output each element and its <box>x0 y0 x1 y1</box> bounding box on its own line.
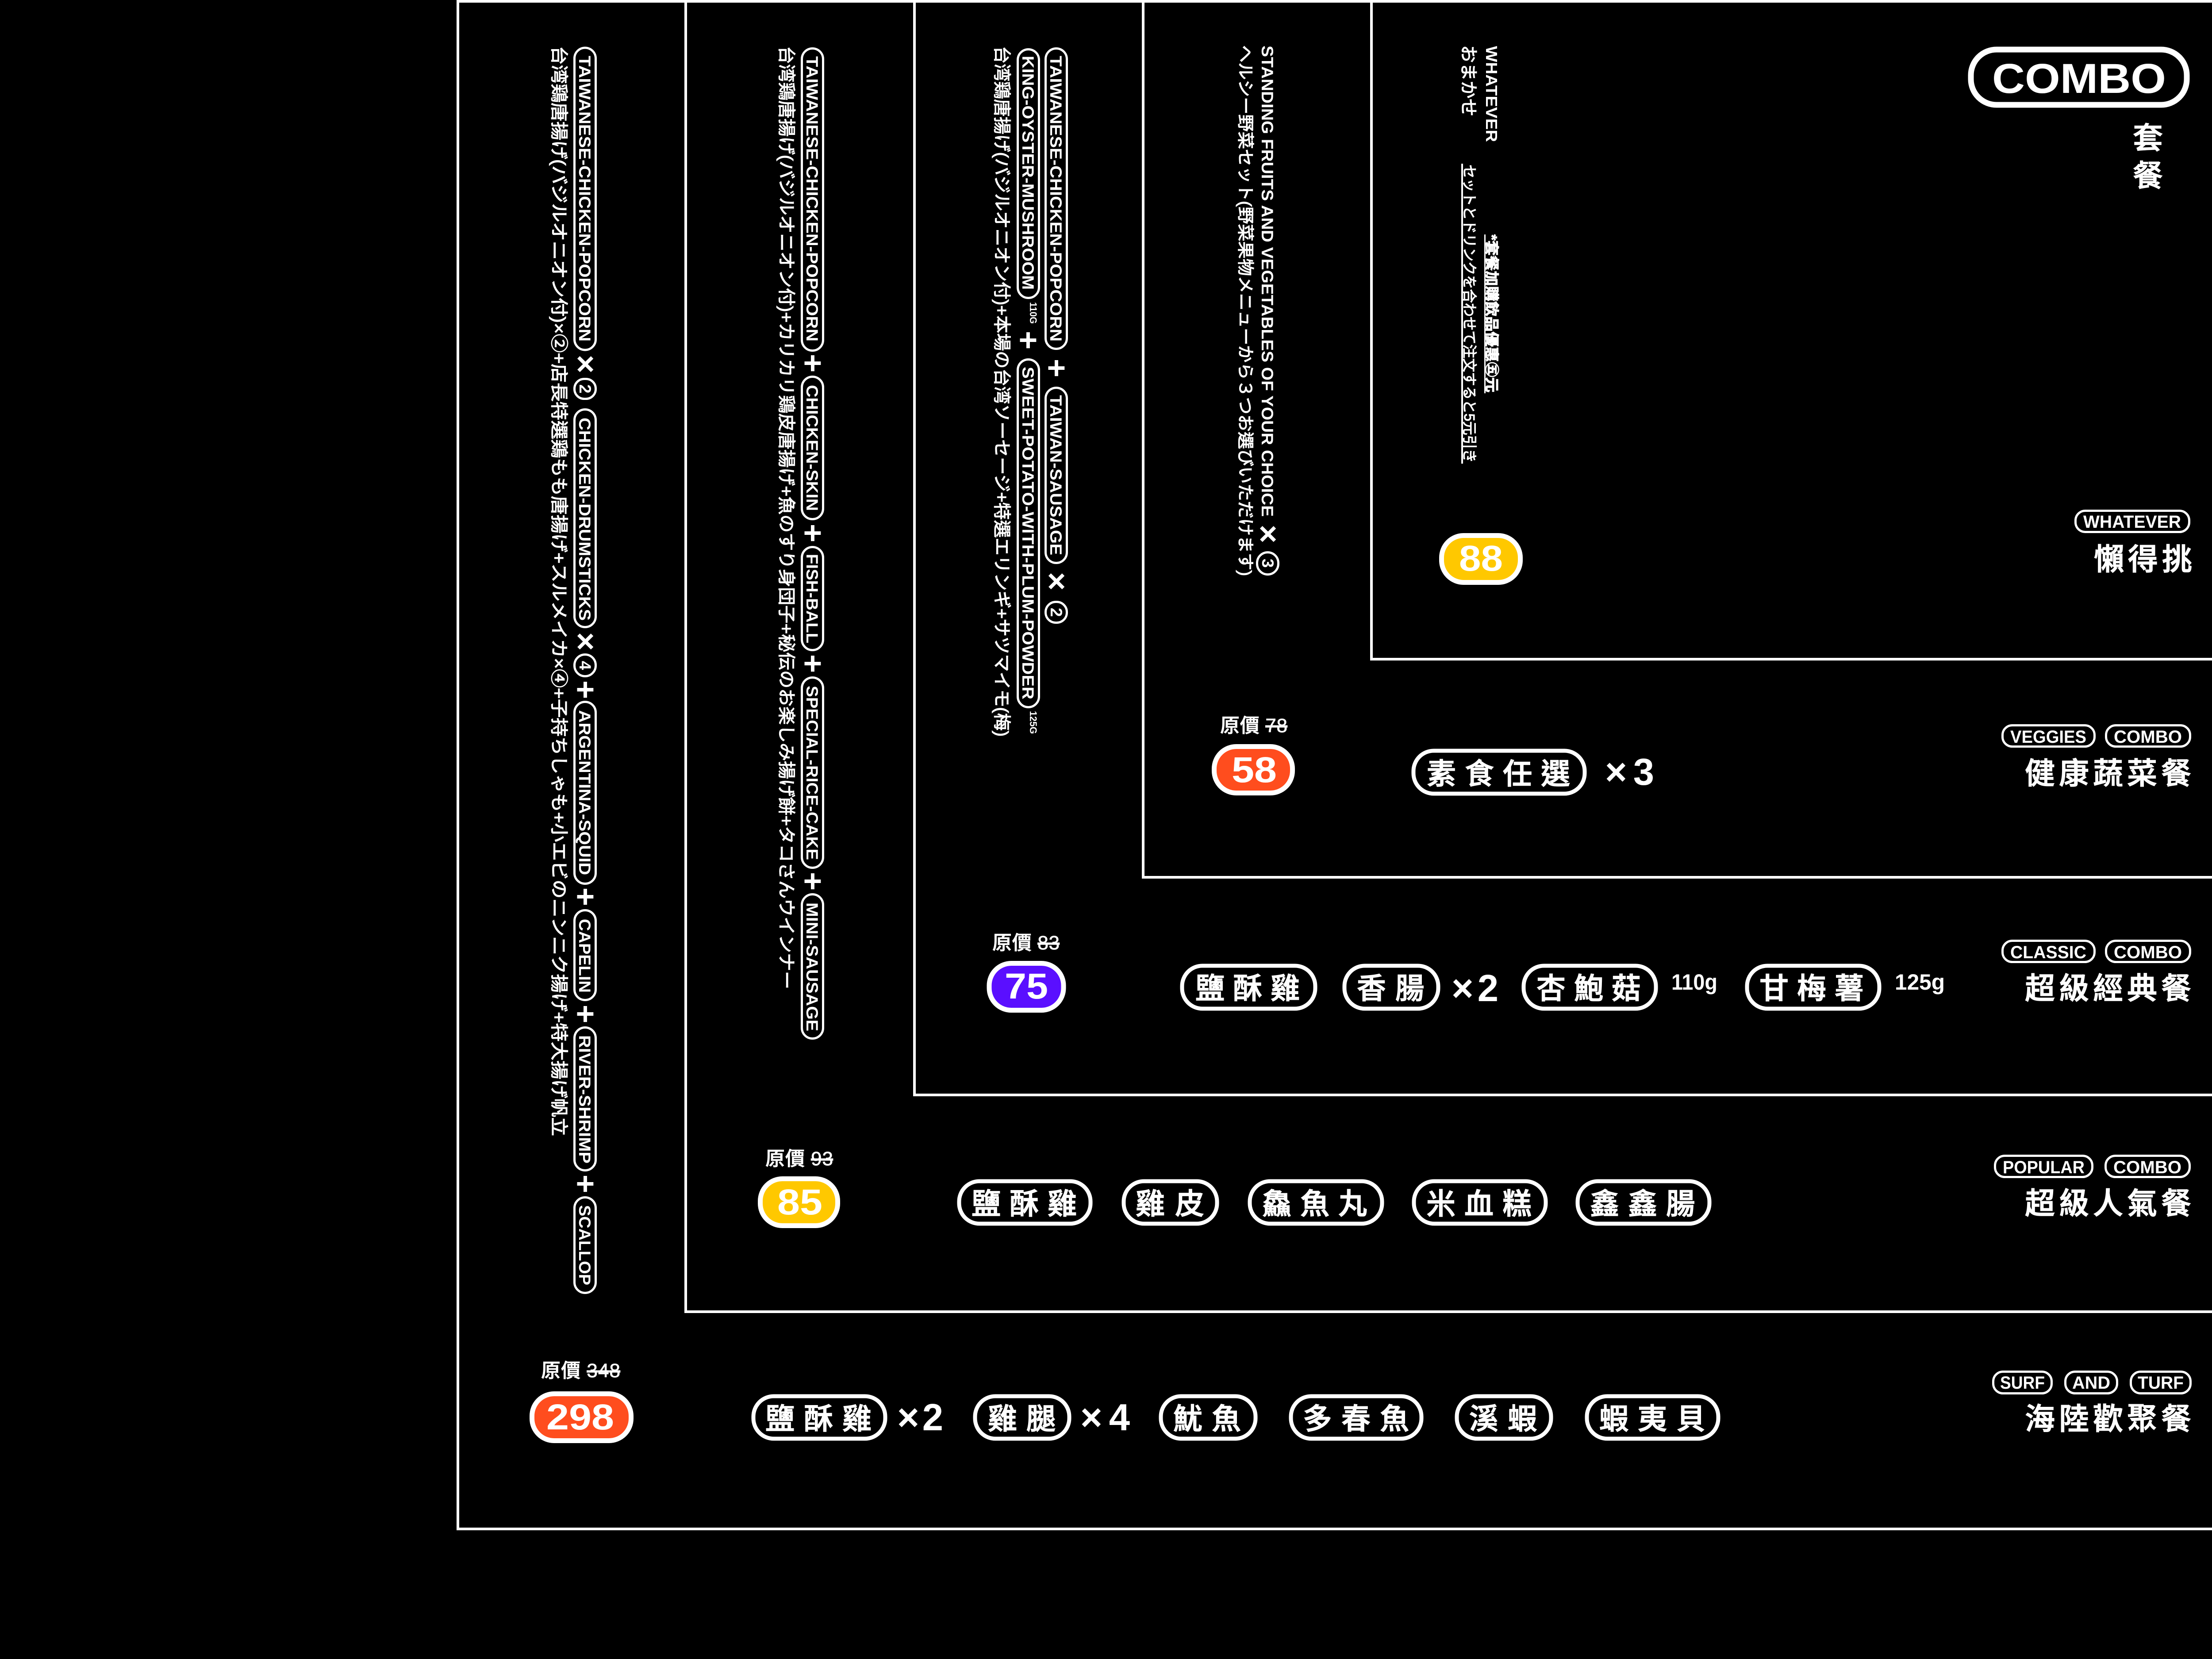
vertical operator: plus: + <box>568 680 603 699</box>
vertical pill: chicken drumsticks: CHICKEN-DRUMSTICKS <box>576 418 594 621</box>
vertical count: 2 <box>574 379 595 399</box>
pill: 多春魚 <box>1291 1396 1421 1439</box>
vertical operator: plus: + <box>795 524 830 542</box>
panel content: veggies combo <box>1214 45 2195 794</box>
price: 75 <box>989 964 1064 1010</box>
panel content: whatever <box>1441 45 2196 582</box>
vertical text: standing fruits: STANDING FRUITS AND VEGETABLES OF YOUR CHOICE <box>1258 46 1276 517</box>
vertical pill: fish ball: FISH-BALL <box>803 554 821 643</box>
vertical pill: taiwanese chicken popcorn: TAIWANESE-CHICKEN-POPCORN <box>576 56 594 342</box>
vertical count: 2: 2 <box>1047 608 1065 617</box>
pill: 雞皮 <box>1124 1181 1217 1224</box>
panel frame: popular combo <box>686 1 2212 1312</box>
price: 298: 298 <box>546 1397 614 1437</box>
vertical text: おまかせ: おまかせ <box>1459 45 1478 116</box>
pill: 香腸: 香腸 <box>1357 972 1434 1005</box>
tag: WHATEVER: WHATEVER <box>2083 512 2181 532</box>
title: 套餐: 餐 <box>2133 159 2167 193</box>
vertical pill: mini sausage: MINI-SAUSAGE <box>803 902 821 1031</box>
tag: AND: AND <box>2072 1373 2110 1393</box>
pill: 鱻魚丸 <box>1250 1181 1382 1224</box>
multiplier x3: ×3 <box>1605 751 1654 793</box>
panel frame: veggies combo <box>1143 1 2212 877</box>
vertical operator: times: × <box>568 632 603 651</box>
vertical text: Japanese description: ヘルシー野菜セット(野菜果物メニューから３つお選びいただけます) <box>1236 45 1254 576</box>
tag: COMBO: COMBO <box>2114 943 2182 962</box>
pill: 鹽酥雞: 鹽酥雞 <box>1195 972 1308 1005</box>
pill: 鑫鑫腸: 鑫鑫腸 <box>1590 1187 1704 1220</box>
pill: 鹽酥雞: 鹽酥雞 <box>765 1402 881 1435</box>
vertical weight 125G: 125G <box>1028 711 1039 734</box>
pill: 多春魚: 多春魚 <box>1303 1402 1418 1435</box>
title: 套餐: 套 <box>2133 122 2167 155</box>
tag: COMBO: COMBO <box>2114 727 2182 747</box>
vertical operator: plus: + <box>568 1005 603 1023</box>
vertical pill: river shrimp: RIVER-SHRIMP <box>576 1035 594 1164</box>
vertical pill: taiwanese chicken popcorn: TAIWANESE-CHICKEN-POPCORN <box>1047 56 1065 342</box>
pill: 鹽酥雞 <box>753 1396 885 1439</box>
heading: 健康蔬菜餐: 健康蔬菜餐 <box>2025 757 2195 791</box>
vertical operator: plus: + <box>795 872 830 891</box>
vertical pill: special rice cake: SPECIAL-RICE-CAKE <box>803 686 821 860</box>
vertical count: 3 <box>1257 552 1279 574</box>
vertical note: drink discount (Japanese): セットとドリンクを合わせて注文すると5元引き <box>1461 165 1478 463</box>
tag: TURF: TURF <box>2138 1373 2184 1393</box>
vertical operator: times: × <box>1250 525 1286 543</box>
vertical pill: scallop: SCALLOP <box>576 1205 594 1285</box>
heading: 懶得挑: 懶得挑 <box>2094 543 2196 576</box>
price: 88 <box>1441 535 1520 582</box>
original price 348: 原價 348 <box>541 1360 620 1382</box>
tag: AND <box>2065 1371 2117 1394</box>
pill: 甘梅薯 <box>1747 966 1879 1009</box>
pill: 魷魚: 魷魚 <box>1173 1402 1250 1435</box>
pill: 素食任選: 素食任選 <box>1427 757 1579 790</box>
pill: 溪蝦 <box>1457 1396 1551 1439</box>
heading: 超級人氣餐: 超級人氣餐 <box>2025 1187 2195 1221</box>
pill: 鱻魚丸: 鱻魚丸 <box>1262 1187 1376 1220</box>
price: 58: 58 <box>1232 750 1277 790</box>
vertical operator: times: × <box>1039 572 1074 591</box>
price: 85: 85 <box>777 1182 822 1222</box>
pill: 鹽酥雞 <box>959 1181 1091 1224</box>
price: 298 <box>532 1394 631 1440</box>
vertical operator: plus: + <box>795 654 830 673</box>
vertical count: 3: 3 <box>1259 559 1277 568</box>
original price 93: 原價 93 <box>765 1148 833 1170</box>
original price 83: 原價 83 <box>992 932 1060 954</box>
pill: 鑫鑫腸 <box>1578 1181 1709 1224</box>
vertical count: 2: 2 <box>576 384 594 393</box>
pill: 雞皮: 雞皮 <box>1136 1187 1214 1220</box>
pill: 香腸 <box>1344 966 1438 1009</box>
vertical weight 110G: 110G <box>1028 302 1039 324</box>
pill: 素食任選 <box>1413 751 1585 794</box>
price: 75: 75 <box>1005 966 1048 1006</box>
vertical operator: plus: + <box>795 354 830 373</box>
tag: SURF: SURF <box>2000 1373 2045 1393</box>
vertical pill: taiwanese chicken popcorn: TAIWANESE-CHICKEN-POPCORN <box>803 56 821 342</box>
vertical operator: plus: + <box>1010 331 1046 349</box>
vertical note: drink discount (Chinese): *套餐加購飲品優惠㊄元 <box>1484 234 1500 392</box>
panel frame: whatever <box>1371 1 2212 659</box>
title: COMBO badge <box>1971 50 2187 105</box>
pill: 甘梅薯: 甘梅薯 <box>1759 972 1872 1005</box>
vertical count: 4: 4 <box>576 661 594 670</box>
weight 110g: 110g <box>1671 970 1717 995</box>
tag: POPULAR: POPULAR <box>2003 1158 2085 1177</box>
vertical count: 2 <box>1046 602 1067 623</box>
panel content: popular combo <box>760 46 2195 1225</box>
pill: 蝦夷貝 <box>1587 1396 1718 1439</box>
price: 85 <box>760 1179 838 1225</box>
vertical count: 4 <box>574 655 595 676</box>
vertical text: Japanese description: 台湾鶏唐揚げ(バジルオニオン付)+本場の台湾ソーセージ+特選エリンギ+サツマイモ(梅) <box>992 46 1011 737</box>
pill: 魷魚 <box>1161 1396 1256 1439</box>
panel frame: classic combo <box>914 1 2212 1095</box>
pill: 蝦夷貝: 蝦夷貝 <box>1599 1402 1715 1435</box>
pill: 鹽酥雞 <box>1182 966 1315 1009</box>
heading: 超級經典餐: 超級經典餐 <box>2025 972 2195 1006</box>
pill: 鹽酥雞: 鹽酥雞 <box>972 1187 1086 1220</box>
pill: 溪蝦: 溪蝦 <box>1469 1402 1546 1435</box>
price: 88: 88 <box>1459 538 1503 579</box>
vertical pill: capelin: CAPELIN <box>576 919 594 993</box>
vertical pill: argentina squid: ARGENTINA-SQUID <box>576 710 594 875</box>
pill: 米血糕 <box>1414 1181 1546 1224</box>
vertical operator: plus: + <box>568 1175 603 1193</box>
price: 58 <box>1214 747 1293 793</box>
weight 125g: 125g <box>1895 970 1945 995</box>
vertical pill: king oyster mushroom: KING-OYSTER-MUSHROOM <box>1019 56 1037 290</box>
vertical text: Japanese description: 台湾鶏唐揚げ(バジルオニオン付)×②+店長特選鶏もも唐揚げ+スルメイカ×④+子持ちしゃも+小エビのニンニク揚げ+特大揚げ帆立 <box>549 46 568 1136</box>
tag: CLASSIC: CLASSIC <box>2010 943 2086 962</box>
panel content: surf and turf combo <box>532 46 2195 1440</box>
pill: 雞腿 <box>975 1396 1069 1439</box>
vertical operator: times: × <box>568 355 603 373</box>
multiplier x4: ×4 <box>1080 1397 1130 1439</box>
vertical operator: plus: + <box>568 887 603 906</box>
multiplier x2: ×2 <box>1452 968 1498 1010</box>
vertical pill: taiwan sausage: TAIWAN-SAUSAGE <box>1047 395 1065 555</box>
vertical pill: sweet potato with plum powder: SWEET-POTATO-WITH-PLUM-POWDER <box>1019 367 1037 699</box>
original price 78: 原價 78 <box>1220 715 1287 737</box>
pill: 米血糕: 米血糕 <box>1426 1187 1540 1220</box>
pill: 雞腿: 雞腿 <box>988 1402 1065 1435</box>
title: COMBO badge: COMBO <box>1992 55 2166 102</box>
vertical pill: chicken skin: CHICKEN-SKIN <box>803 385 821 511</box>
vertical text: WHATEVER: WHATEVER <box>1482 46 1501 142</box>
vertical operator: plus: + <box>1039 359 1074 377</box>
vertical text: Japanese description: 台湾鶏唐揚げ(バジルオニオン付)+カリカリ鶏皮唐揚げ+魚のすり身団子+秘伝のお楽しみ揚げ餅+タコさんウインナー <box>776 46 796 989</box>
panel content: classic combo <box>989 46 2195 1010</box>
pill: 杏鮑菇: 杏鮑菇 <box>1536 972 1649 1005</box>
vertical pill: capelin <box>574 910 595 1000</box>
vertical pill: scallop <box>574 1197 595 1293</box>
tag: VEGGIES: VEGGIES <box>2010 727 2086 747</box>
heading: 海陸歡聚餐: 海陸歡聚餐 <box>2025 1402 2195 1436</box>
tag: COMBO: COMBO <box>2113 1158 2181 1177</box>
multiplier x2: ×2 <box>897 1397 943 1439</box>
title: 套餐 <box>2133 122 2167 193</box>
panel frame: surf and turf combo <box>458 1 2212 1529</box>
pill: 杏鮑菇 <box>1524 966 1656 1009</box>
